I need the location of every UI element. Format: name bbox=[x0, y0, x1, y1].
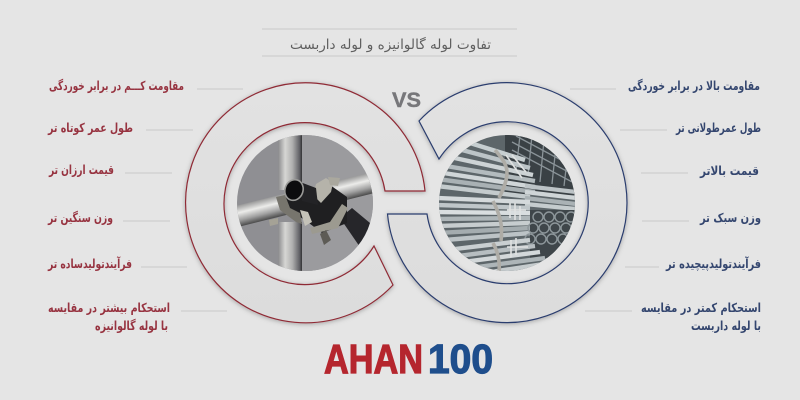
right item 4: وزن سبک تر bbox=[699, 210, 761, 225]
left item 5: فرآیندتولیدساده تر bbox=[47, 256, 132, 271]
right item 4 bbox=[642, 210, 761, 225]
right item 3: قیمت بالاتر bbox=[699, 163, 759, 178]
right item 6 bbox=[585, 300, 761, 333]
title: تفاوت لوله گالوانیزه و لوله داربست bbox=[290, 36, 491, 53]
right item 5: فرآیندتولیدپیچیده تر bbox=[665, 256, 761, 271]
logo: AHAN100: AHAN bbox=[324, 336, 423, 382]
left item 6: استحکام بیشتر در مقایسه bbox=[48, 300, 170, 316]
logo: AHAN100: 100 bbox=[428, 336, 493, 382]
left column: galvanized comparison items bbox=[47, 78, 243, 333]
left item 6 bbox=[48, 300, 227, 333]
right ring: blue outline bbox=[388, 83, 627, 323]
photo: scaffold clamp bbox=[237, 135, 373, 271]
photo: galvanized pipes bundle bbox=[437, 135, 578, 274]
left item 1: مقاومت کـــم در برابر خوردگی bbox=[49, 78, 184, 93]
left item 2: طول عمر کوتاه تر bbox=[47, 120, 133, 135]
right item 3 bbox=[641, 163, 759, 178]
right item 6: استحکام کمتر در مقایسه bbox=[641, 300, 761, 316]
pipes upper group bbox=[437, 143, 535, 197]
left item 3: قیمت ارزان تر bbox=[48, 162, 114, 177]
pipes lower group bbox=[455, 240, 550, 274]
vs label: VS bbox=[392, 89, 421, 112]
pipes right band bbox=[525, 186, 576, 209]
pipes middle band bbox=[437, 198, 530, 240]
pipe ends lower right bbox=[525, 210, 578, 258]
left item 6: با لوله گالوانیزه bbox=[95, 318, 168, 333]
left ring: red outline bbox=[186, 83, 425, 323]
square tubes top right bbox=[505, 135, 576, 195]
metal straps bbox=[493, 150, 507, 272]
right item 6: با لوله داربست bbox=[691, 318, 761, 333]
infographic canvas bbox=[48, 28, 760, 374]
left item 4: وزن سنگین تر bbox=[47, 210, 113, 225]
right item 5 bbox=[625, 256, 761, 271]
right column: scaffold comparison items bbox=[570, 78, 761, 333]
right item 2: طول عمرطولانی تر bbox=[675, 120, 761, 135]
